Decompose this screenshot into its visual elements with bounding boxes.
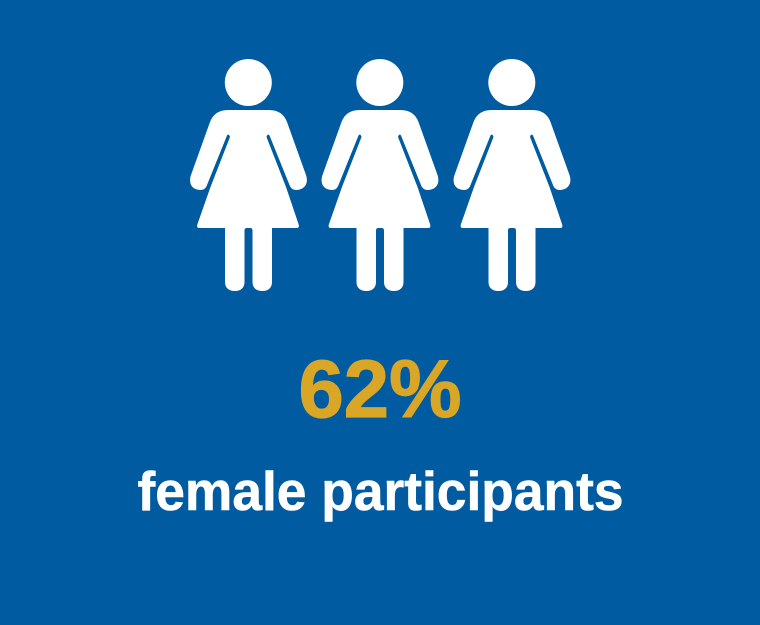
caption: female participants: female participants — [138, 460, 624, 522]
statistic: 62%: 62% — [298, 344, 462, 435]
icon: row of three female figures — [190, 59, 570, 291]
icon: female figure 3 — [454, 59, 570, 291]
icon: female figure 1 — [190, 59, 307, 291]
icon: female figure 2 — [322, 59, 438, 291]
